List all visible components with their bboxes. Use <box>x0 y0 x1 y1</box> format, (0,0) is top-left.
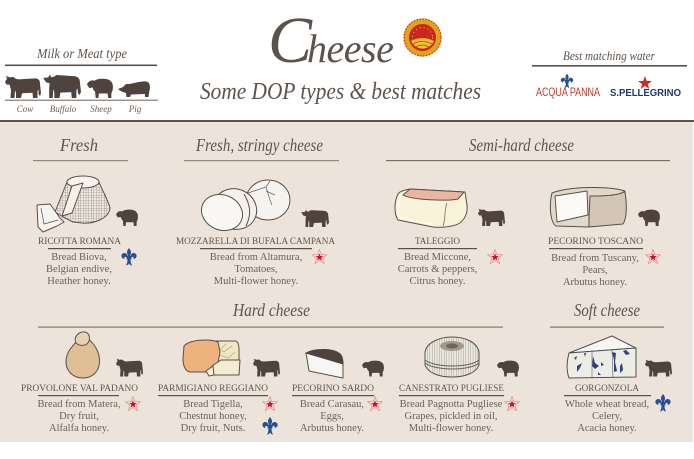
logo: S.Pellegrino: S.PELLEGRINO <box>610 87 681 99</box>
heading: Hard cheese: Hard cheese <box>232 300 310 320</box>
legend heading: Milk or Meat type <box>36 47 127 62</box>
panel: best matching water <box>532 48 687 99</box>
header divider <box>0 120 694 122</box>
description <box>398 252 477 287</box>
illustration: taleggio <box>395 189 467 227</box>
description: Celery, <box>592 411 622 422</box>
illustration: ricotta <box>37 176 110 232</box>
description: Bread Carasau, <box>300 399 364 410</box>
description: Eggs, <box>320 411 344 422</box>
icon: cow <box>645 360 672 376</box>
panel: Taleggio <box>395 189 505 287</box>
description <box>400 399 503 434</box>
icon: sheep <box>497 361 519 376</box>
logo: S.Pellegrino <box>610 76 681 99</box>
icon: sheep: Sheep <box>90 104 112 114</box>
icon: S.Pellegrino star <box>505 396 519 411</box>
name: Mozzarella di Bufala Campana: MOZZARELLA DI BUFALA CAMPANA <box>176 236 335 246</box>
description: Tomatoes, <box>234 264 278 275</box>
icon: Acqua Panna <box>655 394 671 412</box>
name: Ricotta Romana: RICOTTA ROMANA <box>38 236 121 246</box>
icon: cow <box>478 209 505 226</box>
icon: cow <box>253 359 280 376</box>
description <box>300 399 364 434</box>
name: Parmigiano Reggiano: PARMIGIANO REGGIANO <box>158 383 268 393</box>
description <box>210 252 302 287</box>
panel: Mozzarella di Bufala Campana <box>176 180 335 287</box>
icon: pig: Pig <box>128 104 142 114</box>
illustration: pecorino toscano <box>550 187 626 227</box>
description: Arbutus honey. <box>300 423 364 434</box>
heading: Fresh, stringy cheese: Fresh, stringy cheese <box>195 135 323 155</box>
description: Multi-flower honey. <box>214 276 298 287</box>
description: Chestnut honey, <box>179 411 247 422</box>
illustration: pecorino sardo <box>306 349 343 378</box>
description <box>37 399 121 434</box>
name: Pecorino Toscano: PECORINO TOSCANO <box>548 236 643 246</box>
description: Alfalfa honey. <box>49 423 109 434</box>
description: Whole wheat bread, <box>565 399 649 410</box>
description: Dry fruit, <box>59 411 99 422</box>
heading: Fresh <box>33 135 128 161</box>
illustration: canestrato <box>425 337 479 377</box>
illustration: gorgonzola <box>567 336 636 378</box>
icon: Acqua Panna <box>262 417 278 434</box>
icon: sheep <box>638 210 660 226</box>
icon: S.Pellegrino star <box>488 250 502 264</box>
icon: S.Pellegrino star <box>646 250 660 264</box>
icon: S.Pellegrino star <box>126 396 140 411</box>
description: Grapes, pickled in oil, <box>404 411 498 422</box>
name: Provolone Val Padano: PROVOLONE VAL PADANO <box>21 383 138 393</box>
description: Bread from Altamura, <box>210 252 302 263</box>
water heading: Best matching water <box>563 48 656 63</box>
icon: S.Pellegrino star <box>312 250 327 264</box>
panel: Provolone Val Padano <box>21 332 143 434</box>
panel: Pecorino Toscano <box>548 187 660 288</box>
icon: cow <box>5 76 41 114</box>
icon: sheep <box>362 361 384 376</box>
icon: Acqua Panna <box>121 248 137 266</box>
description: Bread Biova, <box>51 252 107 263</box>
heading: Soft cheese: Soft cheese <box>574 300 640 320</box>
icon: pig <box>118 81 150 114</box>
name: Gorgonzola: GORGONZOLA <box>575 383 639 393</box>
logo: Acqua Panna <box>536 74 600 99</box>
heading: Soft cheese <box>550 300 664 328</box>
description <box>551 253 639 288</box>
heading: Fresh: Fresh <box>59 135 98 155</box>
description: Belgian endive, <box>46 264 112 275</box>
panel: Canestrato Pugliese <box>399 337 519 434</box>
description: Bread Miccone, <box>404 252 471 263</box>
content panel <box>0 121 693 442</box>
name: Pecorino Sardo: PECORINO SARDO <box>292 383 374 393</box>
icon: DOP seal <box>404 18 442 56</box>
logo: Acqua Panna: ACQUA PANNA <box>536 85 600 99</box>
heading: Semi-hard cheese: Semi-hard cheese <box>469 135 574 155</box>
name: Taleggio: TALEGGIO <box>415 236 460 246</box>
description <box>46 252 112 287</box>
icon: cow: Cow <box>17 104 33 114</box>
icon: S.Pellegrino star <box>263 396 277 411</box>
title: Cheese <box>268 4 393 77</box>
description: Pears, <box>582 265 608 276</box>
icon: sheep <box>87 79 113 114</box>
subtitle: Some DOP types & best matches <box>200 79 481 105</box>
description: Heather honey. <box>47 276 111 287</box>
icon: sheep <box>116 210 138 226</box>
name: Canestrato Pugliese: CANESTRATO PUGLIESE <box>399 383 504 393</box>
description: Bread from Tuscany, <box>551 253 639 264</box>
description: Bread Pagnotta Pugliese <box>400 399 503 410</box>
description: Acacia honey. <box>577 423 637 434</box>
description: Bread Tigella, <box>183 399 243 410</box>
description: Multi-flower honey. <box>409 423 493 434</box>
description: Dry fruit, Nuts. <box>181 423 245 434</box>
description <box>565 399 649 434</box>
illustration: mozzarella <box>196 180 290 237</box>
panel: Ricotta Romana <box>37 176 138 287</box>
panel: Gorgonzola <box>564 336 672 434</box>
icon: cow <box>116 359 143 376</box>
illustration: provolone <box>66 332 100 378</box>
icon: buffalo <box>43 74 81 114</box>
description: Citrus honey. <box>410 276 465 287</box>
panel: Parmigiano Reggiano <box>158 340 280 434</box>
panel: Pecorino Sardo <box>292 349 384 434</box>
description: Bread from Matera, <box>37 399 121 410</box>
icon: buffalo <box>301 210 329 227</box>
description <box>179 399 247 434</box>
icon: buffalo: Buffalo <box>50 104 77 114</box>
panel: milk or meat type legend <box>5 47 158 114</box>
description: Arbutus honey. <box>563 277 627 288</box>
description: Carrots & peppers, <box>398 264 477 275</box>
icon: S.Pellegrino star <box>368 396 382 411</box>
illustration: parmigiano <box>183 340 240 376</box>
